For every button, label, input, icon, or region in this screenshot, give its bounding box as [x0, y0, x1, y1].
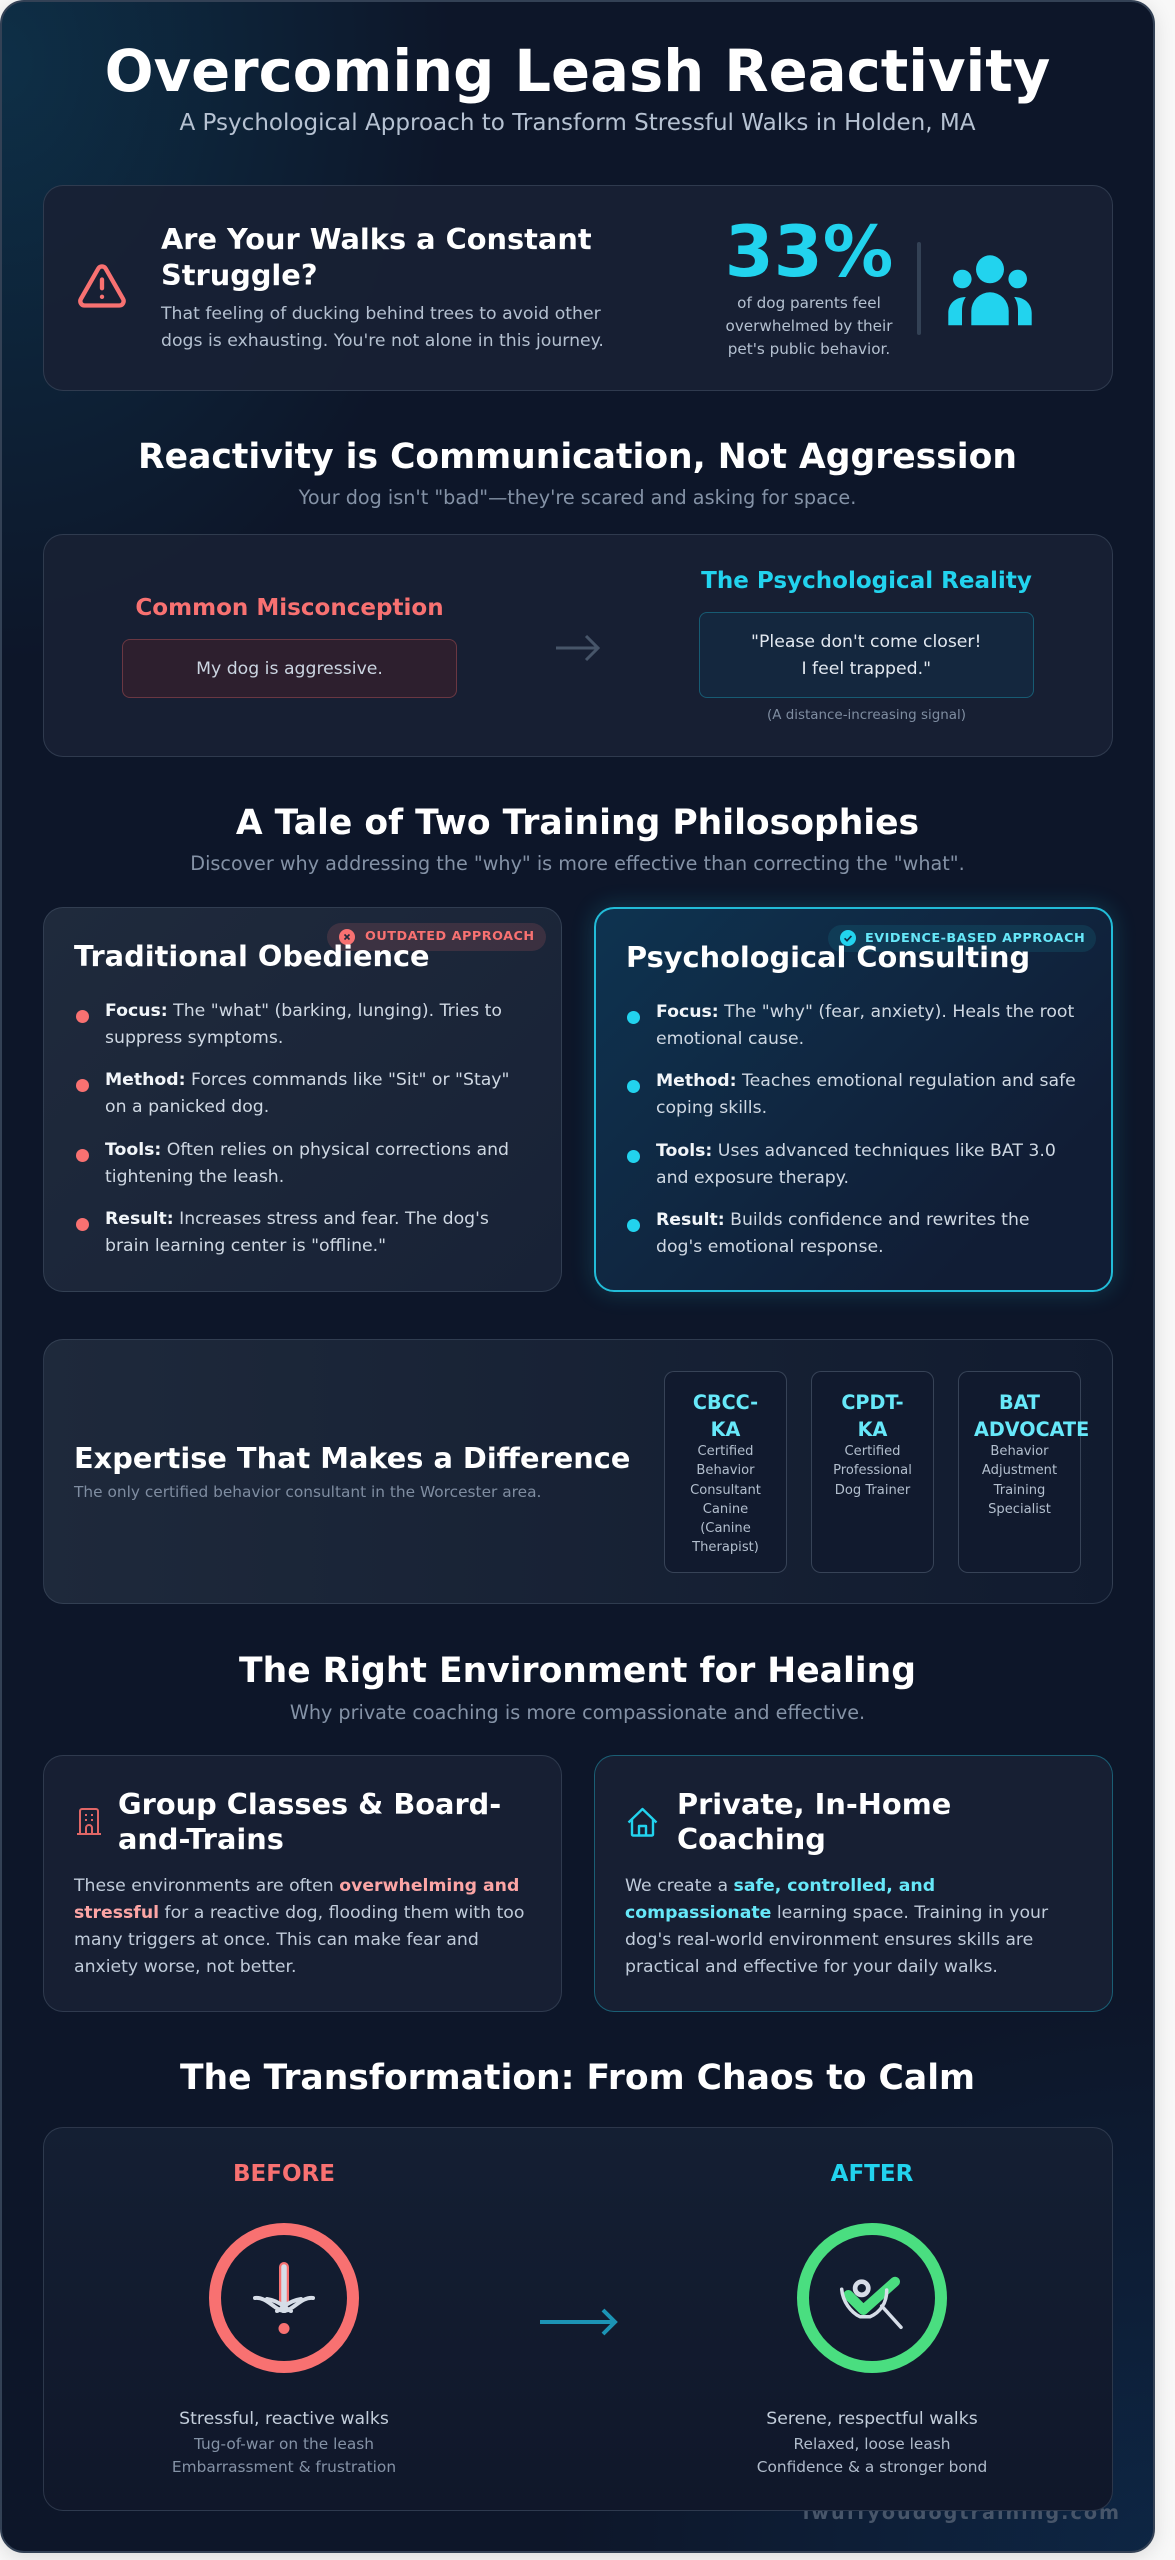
icon: check circle: [840, 930, 856, 946]
box: reality quote: I feel trapped.": [801, 659, 931, 679]
heading: right environment: The Right Environment for Healing: [239, 1651, 916, 1691]
heading: constant struggle: Struggle?: [161, 258, 318, 292]
credential name: CPDT-: [841, 1390, 904, 1414]
text: before details: [172, 2435, 396, 2476]
box: reality quote: "Please don't come closer!: [751, 632, 981, 652]
label: after: AFTER: [831, 2161, 913, 2187]
credential name: [841, 1390, 904, 1440]
text: group classes: [74, 1876, 524, 1977]
text: struggle description: [160, 304, 604, 350]
item: method: [105, 1070, 509, 1117]
text: private coaching: practical and effective for your daily walks.: [625, 1957, 998, 1977]
heading: psychological consulting: Psychological Consulting: [626, 940, 1030, 974]
heading: common misconception: Common Misconception: [135, 595, 444, 621]
credential description: [833, 1444, 912, 1498]
icon: house: [628, 1808, 658, 1837]
credential name second line: ADVOCATE: [974, 1418, 1089, 1440]
panel: before and after: [42, 2127, 1113, 2511]
item: tools: [105, 1140, 509, 1186]
text: private coaching: dog's real-world environment ensures skills are: [625, 1930, 1033, 1950]
list: traditional obedience: [76, 1001, 509, 1256]
credential description: Dog Trainer: [835, 1483, 910, 1498]
heading: group classes: Group Classes & Board-: [118, 1786, 501, 1820]
arrow: before to after: [540, 2308, 618, 2336]
list: psychological consulting: [627, 1002, 1076, 1257]
subtitle: A Psychological Approach to Transform Stressful Walks in Holden, MA: [179, 110, 976, 136]
icon: x circle: [339, 929, 355, 945]
bullet: focus: [76, 1010, 89, 1023]
heading: communication: Reactivity is Communication, Not Aggression: [138, 437, 1017, 477]
text: before main: Stressful, reactive walks: [179, 2409, 389, 2429]
item: method: Method: Forces commands like "Sit" or "Stay": [105, 1070, 509, 1090]
badge: evidence-based approach: [828, 925, 1096, 952]
item: tools: [656, 1140, 1056, 1188]
icon: tense leash in red ring: [209, 2223, 359, 2373]
heading: constant struggle: [161, 222, 592, 292]
card: CBCC-KA credential: [664, 1371, 787, 1573]
item: result: [105, 1209, 489, 1256]
panel: private coaching: [594, 1755, 1113, 2012]
text: after details: Confidence & a stronger bond: [757, 2458, 987, 2476]
panel: expertise: [42, 1339, 1113, 1604]
icon: relaxed leash in green ring: [797, 2223, 947, 2373]
credential name: [693, 1390, 758, 1440]
item: tools: Tools: Uses advanced techniques like BAT 3.0: [656, 1140, 1056, 1160]
item: focus: Focus: The "why" (fear, anxiety). Heals the root: [656, 1002, 1074, 1022]
arrow: misconception to reality: [556, 635, 600, 661]
text: after details: Relaxed, loose leash: [794, 2435, 950, 2453]
credential name: KA: [858, 1418, 887, 1440]
subheading: communication: Your dog isn't "bad"—they're scared and asking for space.: [299, 486, 856, 509]
heading: private coaching: Private, In-Home: [677, 1786, 951, 1820]
credential description: Adjustment: [982, 1463, 1057, 1478]
text: struggle description: dogs is exhausting. You're not alone in this journey.: [161, 330, 604, 350]
text: private coaching: We create a safe, controlled, and: [625, 1876, 935, 1896]
credential description: Consultant: [690, 1483, 761, 1498]
bullet: result: [76, 1218, 89, 1231]
text: stat caption: pet's public behavior.: [728, 340, 890, 358]
item: tools: tightening the leash.: [105, 1166, 284, 1186]
bullet: method: [627, 1080, 640, 1093]
item: focus: Focus: The "what" (barking, lunging). Tries to: [105, 1001, 502, 1021]
credential description: Specialist: [988, 1502, 1051, 1517]
credential description: [690, 1444, 761, 1555]
label: outdated approach: OUTDATED APPROACH: [365, 929, 535, 944]
text: expertise note: The only certified behavior consultant in the Worcester area.: [74, 1483, 541, 1501]
card: CPDT-KA credential: [811, 1371, 934, 1573]
credential description: Behavior: [696, 1463, 755, 1478]
item: focus: [656, 1002, 1074, 1049]
text: after details: [757, 2435, 987, 2476]
item: method: Method: Teaches emotional regulation and safe: [656, 1071, 1076, 1091]
credential description: Certified: [698, 1444, 753, 1459]
heading: traditional obedience: Traditional Obedience: [74, 939, 430, 973]
text: after main: Serene, respectful walks: [766, 2409, 978, 2429]
item: method: [656, 1071, 1076, 1118]
item: method: on a panicked dog.: [105, 1097, 269, 1117]
text: struggle description: That feeling of ducking behind trees to avoid other: [161, 304, 601, 324]
item: focus: suppress symptoms.: [105, 1028, 283, 1048]
footer watermark: iwuffyoudogtraining.com: [803, 2501, 1121, 2524]
credential description: (Canine: [700, 1521, 751, 1536]
item: result: dog's emotional response.: [656, 1237, 884, 1257]
panel: constant struggle: [42, 185, 1113, 391]
heading: constant struggle: Are Your Walks a Constant: [161, 222, 592, 256]
title: Overcoming Leash Reactivity: [105, 38, 1050, 105]
item: result: brain learning center is "offline.": [105, 1236, 386, 1256]
subheading: right environment: Why private coaching is more compassionate and effective.: [290, 1701, 865, 1724]
heading: group classes: and-Trains: [118, 1822, 284, 1856]
item: tools: Tools: Often relies on physical corrections and: [105, 1140, 509, 1160]
bullet: tools: [76, 1149, 89, 1162]
credential name: BAT: [999, 1390, 1040, 1414]
label: before: BEFORE: [233, 2161, 335, 2187]
heading: private coaching: [677, 1786, 951, 1856]
text: group classes: These environments are often overwhelming and: [74, 1876, 519, 1896]
bullet: result: [627, 1219, 640, 1232]
bullet: tools: [627, 1150, 640, 1163]
credential name: KA: [711, 1418, 740, 1440]
heading: transformation: The Transformation: From Chaos to Calm: [180, 2058, 975, 2098]
item: method: coping skills.: [656, 1098, 767, 1118]
panel: group classes: [42, 1755, 562, 2012]
caption: distance-increasing signal: (A distance-increasing signal): [767, 708, 966, 723]
text: private coaching: [625, 1876, 1048, 1977]
text: group classes: stressful for a reactive dog, flooding them with too: [74, 1903, 524, 1923]
heading: expertise: Expertise That Makes a Difference: [74, 1441, 630, 1475]
panel: psychological consulting: [594, 907, 1113, 1292]
item: result: Result: Increases stress and fear. The dog's: [105, 1209, 489, 1229]
divider bar: [917, 242, 921, 335]
text: before details: Tug-of-war on the leash: [194, 2435, 374, 2453]
item: tools: and exposure therapy.: [656, 1168, 849, 1188]
credential description: [982, 1444, 1057, 1517]
text: stat caption: of dog parents feel: [737, 294, 881, 312]
text: before details: Embarrassment & frustration: [172, 2458, 396, 2476]
heading: private coaching: Coaching: [677, 1822, 826, 1856]
text: stat caption: [726, 294, 892, 358]
heading: two philosophies: A Tale of Two Training Philosophies: [236, 803, 919, 843]
icon: building: [77, 1808, 101, 1835]
panel: traditional obedience: [42, 907, 562, 1292]
text: private coaching: compassionate learning space. Training in your: [625, 1903, 1048, 1923]
icon: warning triangle: [78, 264, 126, 308]
text: stat caption: overwhelmed by their: [726, 317, 892, 335]
credential description: Canine: [703, 1502, 748, 1517]
item: result: Result: Builds confidence and rewrites the: [656, 1210, 1030, 1230]
credential description: Certified: [845, 1444, 900, 1459]
text: group classes: anxiety worse, not better.: [74, 1957, 297, 1977]
item: focus: [105, 1001, 502, 1048]
panel: misconception versus reality: [42, 534, 1113, 757]
bullet: method: [76, 1079, 89, 1092]
credential description: Therapist): [692, 1540, 759, 1555]
subheading: two philosophies: Discover why addressing the "why" is more effective than correcting the "what".: [190, 852, 965, 874]
box: misconception quote: [122, 639, 457, 698]
credential description: Professional: [833, 1463, 912, 1478]
card: BAT advocate credential: [958, 1371, 1081, 1573]
label: evidence-based approach: EVIDENCE-BASED APPROACH: [865, 931, 1085, 946]
heading: group classes: [118, 1786, 501, 1856]
icon: group of people: [948, 255, 1032, 326]
box: misconception quote: My dog is aggressive.: [196, 659, 383, 679]
badge: outdated approach: [327, 923, 546, 951]
bullet: focus: [627, 1011, 640, 1024]
credential name: CBCC-: [693, 1390, 758, 1414]
credential description: Training: [994, 1483, 1045, 1498]
text: group classes: many triggers at once. This can make fear and: [74, 1930, 479, 1950]
heading: psychological reality: The Psychological Reality: [701, 568, 1032, 594]
item: focus: emotional cause.: [656, 1029, 804, 1049]
stat: 33 percent: 33%: [725, 211, 893, 293]
credential description: Behavior: [990, 1444, 1049, 1459]
item: result: [656, 1210, 1030, 1257]
box: reality quote: [698, 612, 1034, 698]
